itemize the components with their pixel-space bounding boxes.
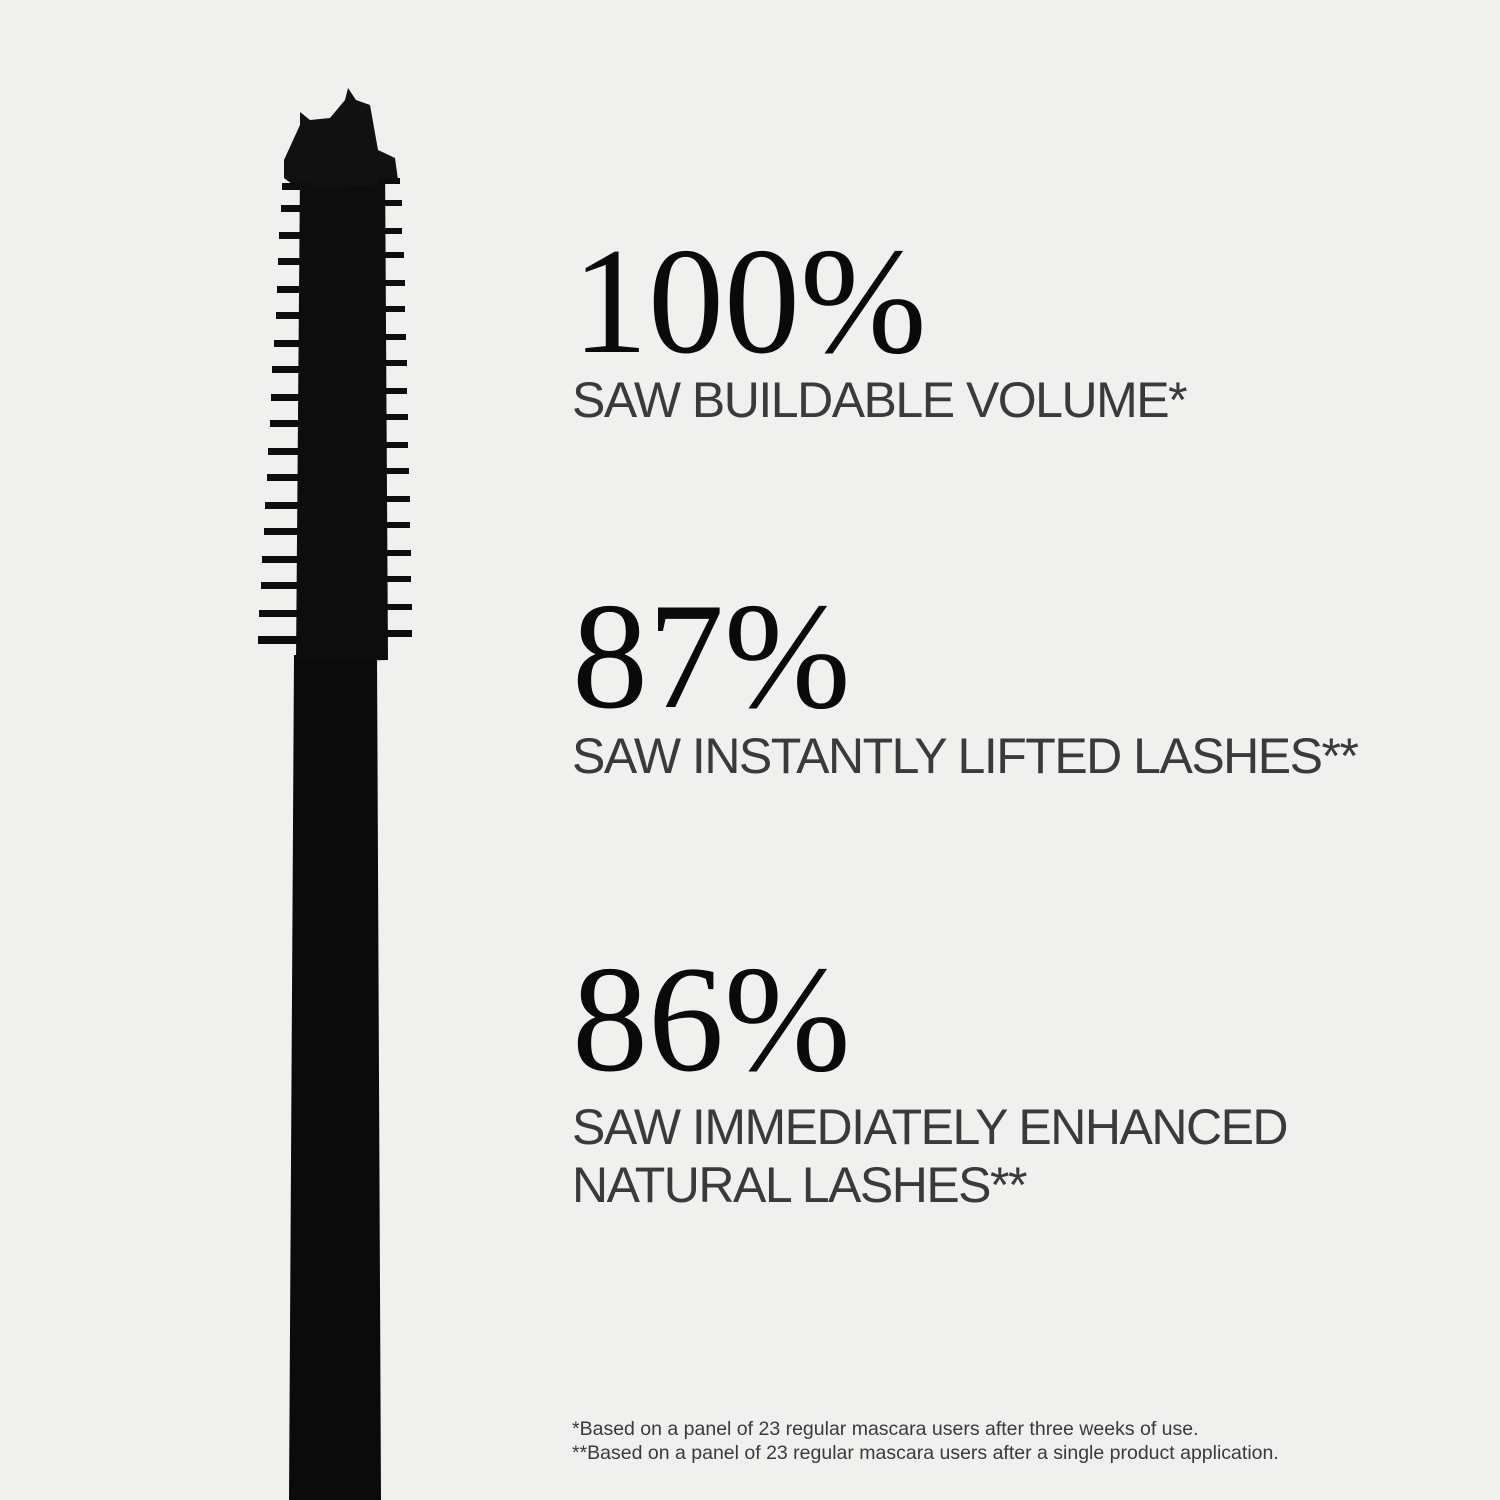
shaft [289, 655, 381, 1500]
brush core [296, 160, 388, 662]
brush tip blob [284, 88, 398, 190]
bristles [258, 178, 412, 644]
label: buildable volume: SAW BUILDABLE VOLUME* [572, 372, 1186, 428]
footnotes [572, 1418, 1279, 1464]
stat: 100%: 100% [572, 217, 927, 385]
stat: 87%: 87% [572, 572, 851, 740]
footnotes: **Based on a panel of 23 regular mascara users after a single product application. [572, 1442, 1279, 1464]
stat: 86%: 86% [572, 935, 851, 1103]
label: enhanced natural lashes: SAW IMMEDIATELY ENHANCED [572, 1099, 1287, 1155]
label: enhanced natural lashes: NATURAL LASHES** [572, 1157, 1026, 1213]
label: enhanced natural lashes [572, 1099, 1287, 1213]
label: lifted lashes: SAW INSTANTLY LIFTED LASHES** [572, 728, 1357, 784]
footnotes: *Based on a panel of 23 regular mascara users after three weeks of use. [572, 1418, 1199, 1440]
